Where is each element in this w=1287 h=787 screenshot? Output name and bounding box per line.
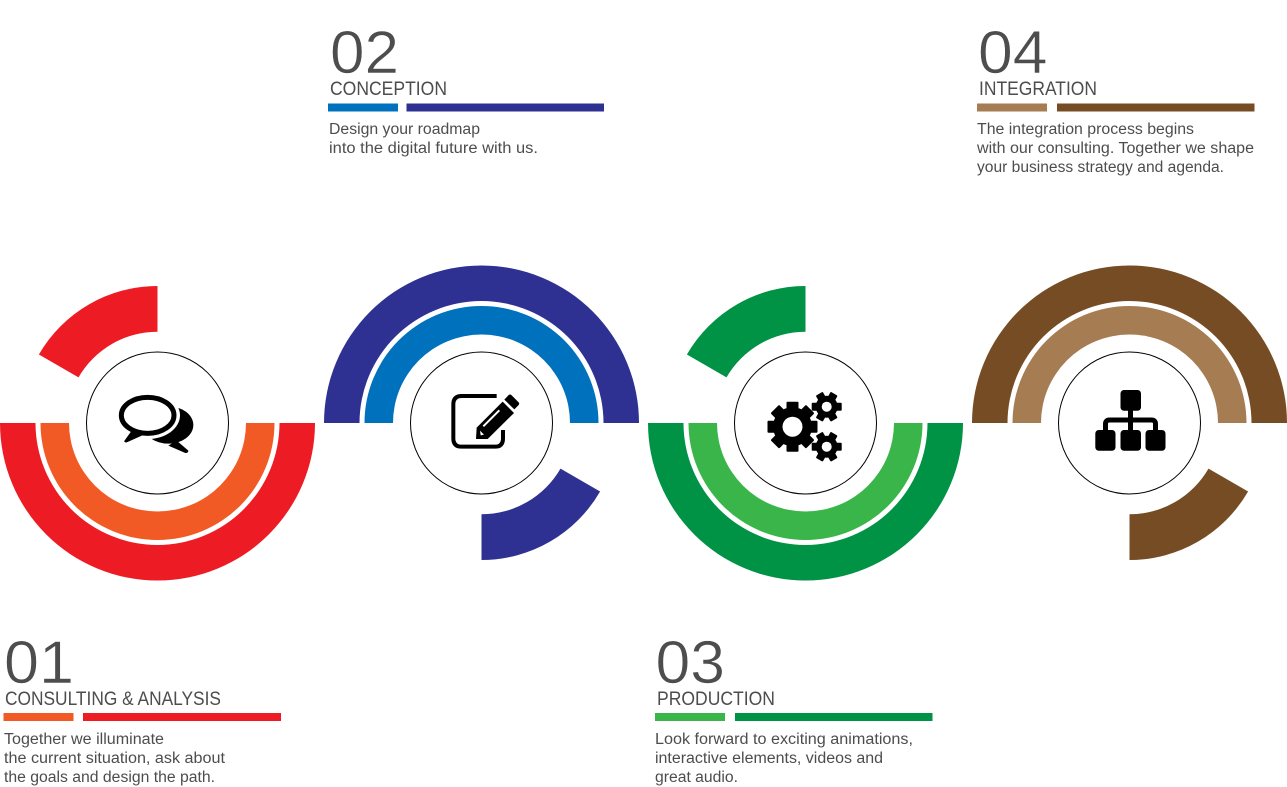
number 01: 01 (4, 629, 74, 696)
panel: step 04 rings (972, 266, 1287, 560)
outer green half ring (648, 423, 963, 580)
inner blue half ring (364, 306, 598, 423)
icon: org chart (1095, 390, 1166, 451)
description: the goals and design the path. (4, 769, 215, 786)
green small arc (687, 286, 806, 377)
description: interactive elements, videos and (655, 750, 883, 767)
colour bars (328, 104, 604, 112)
description: The integration process begins (977, 121, 1194, 138)
panel: step 01 rings (0, 286, 315, 580)
navy small arc (482, 469, 600, 560)
small lower gear (812, 432, 842, 462)
text block: step 01 (4, 629, 281, 786)
heading: PRODUCTION (657, 689, 775, 710)
small upper gear (812, 392, 842, 422)
center circle (734, 352, 876, 494)
description (976, 121, 1254, 176)
text block: step 03 (655, 629, 932, 786)
large gear (768, 402, 818, 452)
number 03: 03 (656, 629, 725, 696)
inner light green half ring (688, 423, 922, 540)
number 02: 02 (330, 19, 399, 86)
panel: step 02 rings (324, 266, 639, 560)
description (655, 731, 913, 786)
icon: chat bubbles (115, 392, 193, 453)
outer brown half ring (972, 266, 1287, 423)
colour bars (977, 104, 1254, 112)
icon: gears (768, 392, 842, 462)
inner orange half ring (40, 423, 274, 540)
description: the current situation, ask about (4, 750, 226, 767)
red small arc (39, 286, 158, 377)
description: into the digital future with us. (329, 140, 538, 157)
heading: INTEGRATION (979, 79, 1097, 100)
description (329, 121, 538, 157)
description: Design your roadmap (329, 121, 480, 138)
center circle (1058, 352, 1200, 494)
heading: CONSULTING & ANALYSIS (5, 689, 221, 710)
description: Together we illuminate (4, 731, 164, 748)
description: your business strategy and agenda. (977, 159, 1224, 176)
outer red half ring (0, 423, 315, 580)
number 04: 04 (978, 19, 1048, 86)
inner tan half ring (1012, 306, 1246, 423)
panel: step 03 rings (648, 286, 963, 580)
text block: step 04 (976, 19, 1254, 176)
heading: CONCEPTION (330, 79, 447, 100)
colour bars (655, 713, 932, 721)
description: Look forward to exciting animations, (655, 731, 913, 748)
center circle (410, 352, 552, 494)
colour bars (4, 713, 281, 721)
description: with our consulting. Together we shape (976, 140, 1254, 157)
description: great audio. (655, 769, 738, 786)
center circle (86, 352, 228, 494)
brown small arc (1130, 469, 1248, 560)
text block: step 02 (328, 19, 604, 157)
icon: pencil on note (453, 394, 519, 447)
outer navy half ring (324, 266, 639, 423)
description (4, 731, 226, 786)
